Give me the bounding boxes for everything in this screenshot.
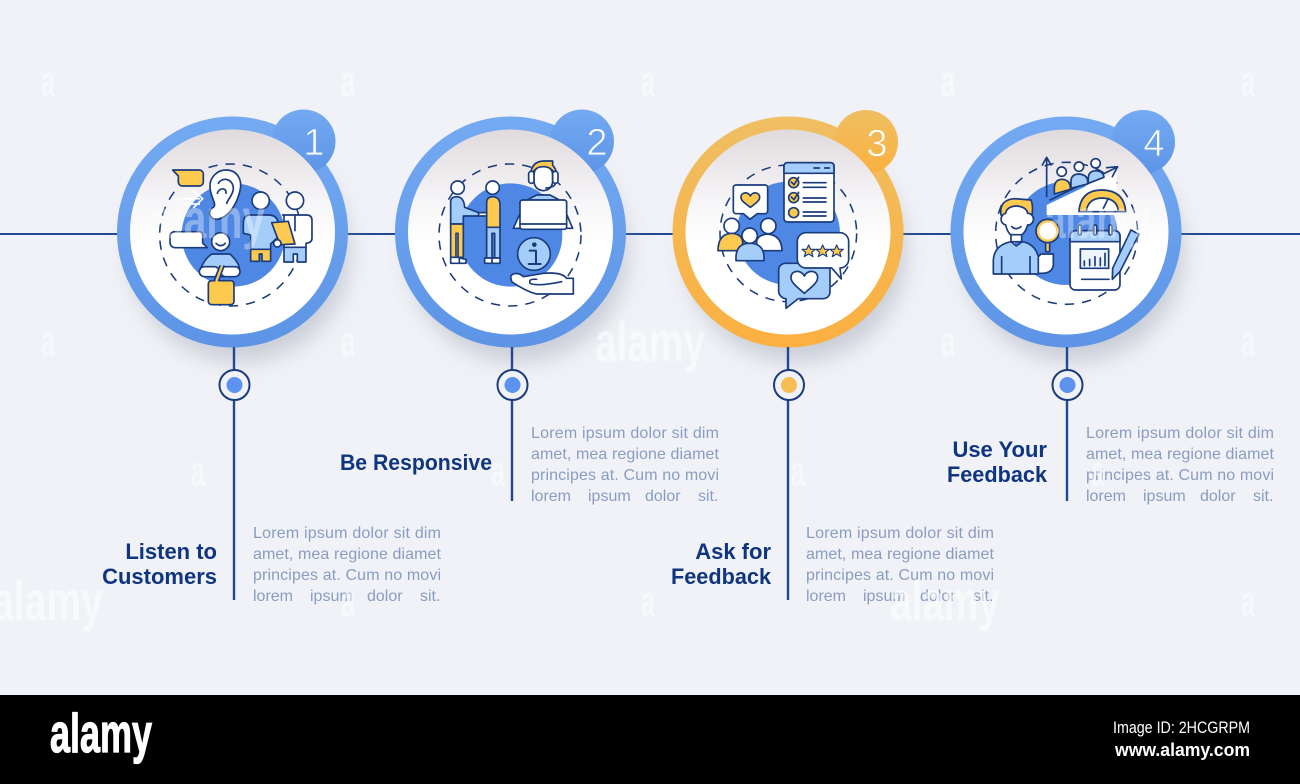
watermarks: a [641,577,655,626]
watermarks: alamy [150,187,265,250]
footer logo: alamy [50,702,152,764]
step 2 body text: sit. [698,488,718,505]
watermarks: a [941,57,955,106]
step 2 circle [395,110,628,362]
step 2 connector with node [498,347,528,501]
watermarks: a [1241,317,1255,366]
icon: listening to customers [160,164,312,306]
step 4 body text: principes at. Cum no movi [1086,467,1274,484]
icon: ask for feedback [718,163,857,308]
watermarks: a [341,57,355,106]
badge number 1: 1 [303,122,325,164]
badge number 3: 3 [866,123,888,165]
watermarks: a [341,317,355,366]
step 4 heading: Feedback [947,462,1048,487]
watermarks: a [791,447,805,496]
step 3 body text: principes at. Cum no movi [806,567,994,584]
step 1 body text: ipsum [310,588,353,605]
watermarks: a [1241,57,1255,106]
step 4 heading: Use Your [952,437,1047,462]
watermarks: a [341,577,355,626]
watermarks: a [1241,577,1255,626]
step 4 connector with node [1052,347,1082,501]
watermarks: a [191,447,205,496]
step 2 body text: dolor [645,488,681,505]
step 1 body text: principes at. Cum no movi [253,567,441,584]
step 4 body text: Lorem ipsum dolor sit dim [1086,425,1274,442]
watermarks: a [941,317,955,366]
watermarks [0,57,1255,632]
step 4 circle [950,110,1184,362]
step 2 body text: ipsum [588,488,631,505]
watermarks: a [1091,447,1105,496]
timeline horizontal line [0,233,1300,235]
step 1 heading: Listen to [125,539,217,564]
watermarks: a [641,57,655,106]
step 3 body text: lorem [806,588,846,605]
step 1 connector with node [220,347,250,600]
watermarks: a [41,317,55,366]
step 3 body text: Lorem ipsum dolor sit dim [806,525,994,542]
watermarks: alamy [1045,187,1150,250]
step 1 body text: Lorem ipsum dolor sit dim [253,525,441,542]
website: www.alamy.com [1114,740,1250,760]
step 2 heading: Be Responsive [340,450,492,475]
image id: Image ID: 2HCGRPM [1113,718,1250,737]
watermarks: a [491,447,505,496]
step 1 body text: amet, mea regione diamet [253,546,442,563]
step 3 body text: dolor [920,588,956,605]
step 3 body text: sit. [973,588,993,605]
step 4 body text: dolor [1200,488,1236,505]
icon: use your feedback [993,157,1139,304]
watermarks: a [41,57,55,106]
step 4 body text: sit. [1253,488,1273,505]
watermarks: alamy [890,569,1000,632]
step 3 heading: Ask for [695,539,771,564]
step 3 circle [672,110,906,362]
step 3 body text: amet, mea regione diamet [806,546,995,563]
step 1 heading: Customers [102,564,217,589]
footer bar [0,695,1300,784]
step 1 body text: lorem [253,588,293,605]
step 4 body text: amet, mea regione diamet [1086,446,1275,463]
watermarks: alamy [595,310,705,373]
step 2 body text: amet, mea regione diamet [531,446,720,463]
icon: responsive support [439,161,581,306]
step 1 body text: dolor [367,588,403,605]
badge number 4: 4 [1143,123,1165,165]
step 1 body text: sit. [420,588,440,605]
step 4 body text: lorem [1086,488,1126,505]
step 3 body text: ipsum [863,588,906,605]
step 1 circle [117,110,350,362]
badge number 2: 2 [586,122,608,164]
step 2 body text: Lorem ipsum dolor sit dim [531,425,719,442]
step 3 connector with node [774,347,804,600]
step 2 body text: principes at. Cum no movi [531,467,719,484]
step 3 heading: Feedback [671,564,772,589]
step 4 body text: ipsum [1143,488,1186,505]
step 2 body text: lorem [531,488,571,505]
